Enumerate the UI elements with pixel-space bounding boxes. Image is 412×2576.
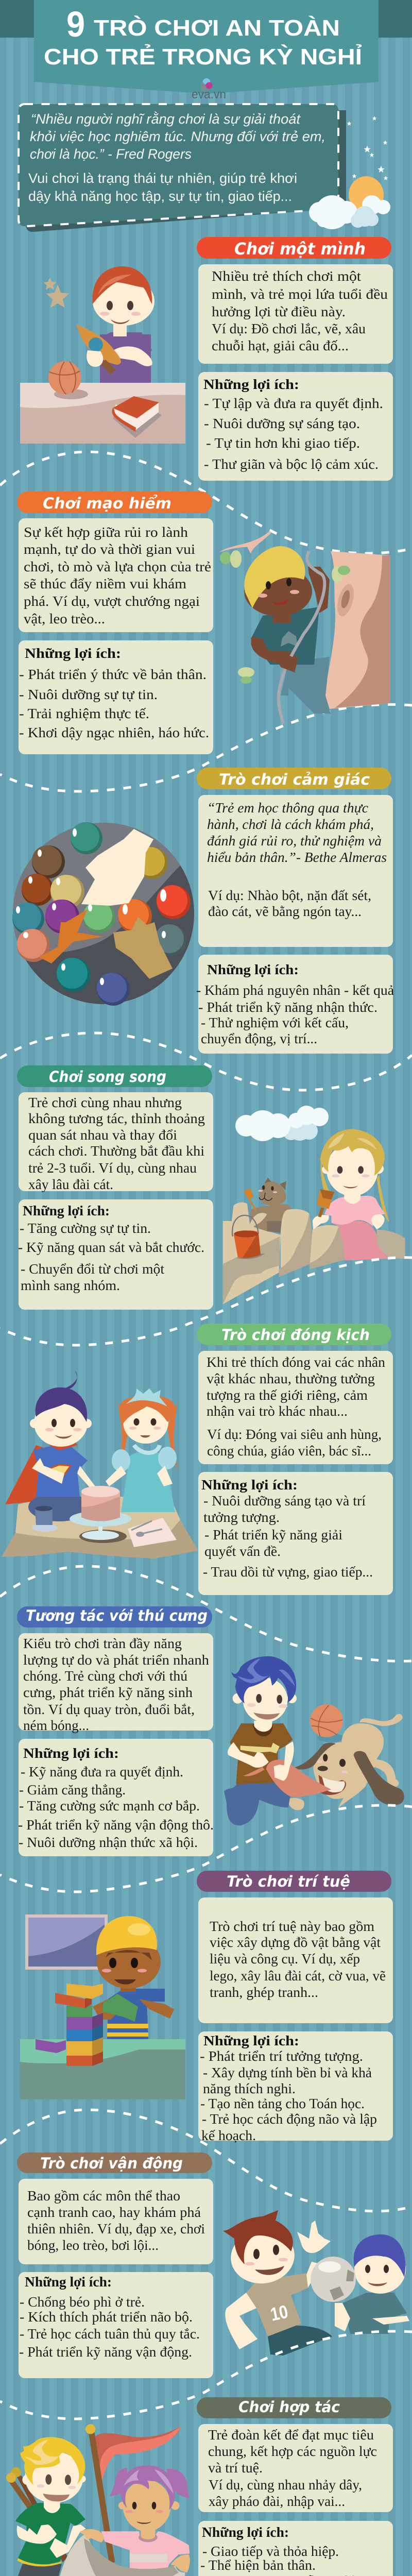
panel: chơi hợp tác benefits — [198, 2521, 393, 2576]
logo: eva.vn — [192, 78, 226, 101]
girl — [313, 1129, 389, 1261]
panel: chơi song song benefits: - Tăng cường sự tự tin. — [20, 1221, 151, 1236]
panel: chơi hợp tác benefits: Những lợi ích: — [202, 2524, 289, 2540]
panel: trò chơi vận động benefits: - Phát triển kỹ năng vận động. — [19, 2344, 192, 2360]
panel: trò chơi trí tuệ benefits: Những lợi ích: — [203, 2033, 299, 2048]
stars — [44, 278, 69, 308]
dashed path 2 — [0, 704, 412, 791]
panel: chơi mạo hiểm benefits: - Trải nghiệm thực tế. — [19, 706, 149, 721]
section 5 heading pill — [197, 1324, 391, 1345]
panel: chơi mạo hiểm description: Sự kết hợp giữa rủi ro lành — [24, 524, 188, 540]
panel: trò chơi cảm giác description: “Trẻ em học thông qua thực — [207, 800, 368, 816]
illustration: girl and bear at sand castle — [223, 1129, 405, 1304]
title — [44, 4, 362, 70]
panel: trò chơi đóng kịch description: nhận vai trò khác nhau... — [207, 1403, 348, 1419]
table — [20, 383, 185, 444]
illustration: children with sack and flag — [6, 2424, 190, 2576]
dashed path 4 — [0, 1258, 412, 1345]
panel: trò chơi đóng kịch description: Khi trẻ thích đóng vai các nhân — [207, 1354, 386, 1370]
quote text: chơi là học.” - Fred Rogers — [30, 146, 192, 162]
bucket — [232, 1215, 265, 1259]
panel: trò chơi trí tuệ description: liệu và công cụ. Ví dụ, xếp — [210, 1951, 360, 1967]
ball — [48, 361, 81, 394]
panel: trò chơi trí tuệ description — [198, 1897, 393, 2023]
panel: tương tác với thú cưng description — [19, 1633, 213, 1733]
paint blobs — [12, 822, 191, 1006]
panel: tương tác với thú cưng benefits: - Tăng cường sức mạnh cơ bắp. — [19, 1798, 200, 1814]
soccer ball — [311, 2257, 356, 2302]
panel: tương tác với thú cưng description: tồn. Ví dụ quay tròn, đuổi bắt, — [23, 1702, 195, 1717]
panel: chơi một mình benefits: Những lợi ích: — [203, 377, 299, 392]
panel: chơi mạo hiểm description: mạnh, tự do và thời gian vui — [24, 541, 195, 557]
cup and saucer — [32, 1506, 58, 1532]
hands — [79, 2529, 190, 2572]
sand ground — [223, 1202, 405, 1304]
panel: tương tác với thú cưng description: Kiểu trò chơi tràn đầy năng — [23, 1636, 182, 1651]
tan splat — [113, 917, 173, 979]
panel: trò chơi cảm giác benefits: chuyển động, vị trí... — [201, 1031, 317, 1046]
panel: chơi một mình description: hưởng lợi từ điều này. — [212, 304, 346, 319]
panel: chơi mạo hiểm benefits: - Khơi dậy ngạc nhiên, háo hức. — [19, 725, 209, 740]
held green block — [103, 1994, 138, 2022]
illustration: boy climbing tree — [219, 531, 390, 724]
title: TRÒ CHƠI AN TOÀN — [94, 15, 340, 41]
dog — [288, 1714, 404, 1810]
panel: trò chơi trí tuệ benefits: kế hoạch. — [201, 2128, 256, 2143]
dashed path 6 — [0, 1805, 412, 1892]
panel: trò chơi vận động description: thiên nhiên. Ví dụ, đạp xe, chơi — [27, 2221, 205, 2236]
panel: tương tác với thú cưng benefits: - Kỹ năng đưa ra quyết định. — [21, 1764, 183, 1780]
block tower — [36, 1984, 103, 2066]
panel: chơi một mình benefits: - Tự tin hơn khi giao tiếp. — [206, 435, 360, 451]
tree trunk — [324, 551, 390, 709]
panel: trò chơi đóng kịch benefits: quyết vấn đề. — [204, 1544, 281, 1559]
panel: chơi song song description: Trẻ chơi cùng nhau nhưng — [28, 1095, 182, 1110]
illustration: boys playing football — [223, 2210, 409, 2355]
cake — [70, 1486, 131, 1543]
panel: tương tác với thú cưng description: lượng tự do và phát triển nhanh — [23, 1652, 210, 1668]
panel: chơi một mình benefits — [198, 372, 393, 481]
panel: trò chơi vận động description — [19, 2179, 213, 2264]
dashed path 1 — [0, 452, 412, 553]
boy in number 10 shirt: 10 — [268, 2301, 290, 2325]
section 3 heading pill: Trò chơi cảm giác — [219, 771, 370, 788]
panel: tương tác với thú cưng benefits: - Nuôi dưỡng nhận thức xã hội. — [19, 1835, 198, 1850]
panel: trò chơi đóng kịch description: công chúa, giáo viên, bác sĩ... — [207, 1443, 371, 1459]
bear — [244, 1178, 292, 1233]
dashed path 7 — [0, 2110, 412, 2211]
section 1 heading pill: Chơi một mình — [234, 239, 366, 259]
table — [20, 2039, 185, 2099]
boy — [244, 546, 331, 714]
panel: trò chơi đóng kịch benefits — [198, 1472, 393, 1595]
panel: trò chơi đóng kịch benefits: tưởng tượng. — [203, 1510, 280, 1525]
panel: chơi mạo hiểm benefits — [19, 640, 213, 754]
panel: trò chơi cảm giác description — [198, 795, 393, 947]
flag — [85, 2424, 181, 2563]
clouds beside sand castle — [235, 1106, 329, 1141]
panel: tương tác với thú cưng benefits — [18, 1739, 214, 1856]
panel: chơi song song description: không tương tác, thỉnh thoảng — [28, 1111, 205, 1126]
panel: tương tác với thú cưng benefits: Những lợi ích: — [23, 1745, 119, 1761]
panel: chơi một mình benefits: - Tự lập và đưa ra quyết định. — [204, 396, 383, 411]
panel: trò chơi trí tuệ benefits: - Phát triển trí tưởng tượng. — [200, 2048, 363, 2064]
purple-haired girl — [101, 2465, 190, 2569]
hand — [81, 829, 153, 906]
panel: chơi mạo hiểm description — [19, 518, 213, 632]
orange splat — [39, 909, 103, 963]
panel: chơi mạo hiểm description: phá. Ví dụ, vượt chướng ngại — [24, 594, 200, 609]
panel: trò chơi cảm giác description: đánh giá rủi ro, thử nghiệm và — [207, 833, 382, 849]
header banner — [0, 0, 412, 94]
panel: chơi một mình description — [198, 264, 393, 364]
panel: trò chơi đóng kịch description: Ví dụ: Đóng vai siêu anh hùng, — [207, 1427, 382, 1442]
panel: chơi mạo hiểm description: vật, leo trèo... — [24, 611, 105, 626]
panel: chơi mạo hiểm benefits: Những lợi ích: — [25, 646, 121, 661]
quote text: dậy khả năng học tập, sự tự tin, giao tiếp... — [28, 189, 292, 204]
panel: chơi hợp tác description: xây pháo đài, nhập vai... — [209, 2494, 345, 2509]
section 8 heading pill — [17, 2153, 212, 2173]
panel: chơi hợp tác benefits: - Giao tiếp và thỏa hiệp. — [202, 2544, 339, 2559]
panel: chơi một mình description: Ví dụ: Đồ chơi lắc, vẽ, xâu — [212, 321, 366, 336]
book — [112, 396, 162, 438]
quote text — [28, 111, 325, 204]
panel: chơi một mình benefits: - Nuôi dưỡng sự sáng tạo. — [204, 416, 360, 431]
panel: chơi song song benefits — [18, 1199, 213, 1310]
panel: trò chơi cảm giác description: đào cát, vẽ bằng ngón tay... — [208, 904, 362, 919]
panel: chơi mạo hiểm benefits: - Nuôi dưỡng sự tự tin. — [19, 687, 158, 702]
panel: trò chơi trí tuệ description: lego, xây lâu đài cát, cờ vua, vẽ — [210, 1968, 386, 1984]
panel: trò chơi đóng kịch benefits: Những lợi ích: — [201, 1477, 298, 1493]
superhero boy — [5, 1370, 95, 1521]
section 2 heading pill: Chơi mạo hiểm — [43, 495, 171, 512]
section 8 heading pill: Trò chơi vận động — [40, 2155, 183, 2172]
panel: chơi song song description: quan sát nhau và thay đổi — [28, 1127, 177, 1143]
panel: tương tác với thú cưng benefits: - Giảm căng thẳng. — [19, 1782, 126, 1798]
title: 9 — [66, 4, 85, 44]
panel: trò chơi trí tuệ description: Trò chơi trí tuệ này bao gồm — [210, 1919, 374, 1934]
panel: trò chơi trí tuệ benefits: - Tạo nền tảng cho Toán học. — [200, 2096, 365, 2111]
panel: chơi mạo hiểm description: sẽ thúc đẩy niềm vui khám — [24, 576, 186, 591]
panel: trò chơi trí tuệ benefits: năng thích nghi. — [203, 2081, 296, 2096]
princess girl — [106, 1388, 179, 1512]
illustration: superhero and princess with cake — [2, 1370, 198, 1558]
panel: trò chơi đóng kịch description: vật khác nhau, thường tưởng — [207, 1371, 375, 1386]
panel: trò chơi vận động benefits — [19, 2272, 213, 2378]
panel: tương tác với thú cưng description: cưng, phát triển kỹ năng sinh — [23, 1685, 193, 1700]
panel: trò chơi vận động benefits: - Chống béo phì ở trẻ. — [20, 2294, 145, 2310]
section 2 heading pill — [17, 492, 212, 513]
panel: trò chơi trí tuệ description: tranh, ghép tranh... — [210, 1985, 318, 2000]
section 1 heading pill — [197, 237, 391, 259]
panel: tương tác với thú cưng description: ném bóng... — [23, 1718, 89, 1733]
section 7 heading pill: Trò chơi trí tuệ — [227, 1873, 350, 1890]
quote text: khỏi việc học nghiêm túc. Nhưng đối với trẻ em, — [30, 129, 325, 144]
panel: chơi mạo hiểm benefits: - Phát triển ý thức về bản thân. — [19, 667, 207, 682]
section 7 heading pill — [197, 1871, 391, 1892]
panel: trò chơi cảm giác benefits: - Thử nghiệm với kết cấu, — [201, 1015, 349, 1030]
panel: chơi một mình description: chuỗi hạt, giải câu đố... — [212, 338, 349, 353]
panel: trò chơi vận động benefits: - Trẻ học cách tuân thủ quy tắc. — [20, 2326, 200, 2342]
logo: eva.vn: eva.vn — [192, 88, 226, 101]
illustration: paint palette — [0, 819, 194, 1006]
section 4 heading pill: Chơi song song — [49, 1068, 166, 1086]
section 6 heading pill: Tương tác với thú cưng — [26, 1607, 208, 1624]
section 9 heading pill — [197, 2397, 391, 2418]
panel: chơi song song benefits: - Chuyển đổi từ chơi một — [21, 1261, 165, 1277]
blond boy — [15, 2437, 86, 2576]
panel: trò chơi cảm giác benefits: Những lợi ích: — [207, 962, 299, 977]
panel: chơi một mình description: mình, và trẻ mọi lứa tuổi đều — [212, 286, 388, 302]
panel: trò chơi vận động description: bóng, leo trèo, bơi lội... — [27, 2238, 159, 2253]
panel: trò chơi đóng kịch description — [198, 1351, 393, 1464]
dashed path 3 — [0, 1033, 412, 1090]
panel: chơi hợp tác description: chung, kết hợp các nguồn lực — [208, 2444, 377, 2459]
panel: trò chơi vận động description: cạnh tranh cao, hay khám phá — [27, 2205, 201, 2220]
panel: chơi song song benefits: - Kỹ năng quan sát và bắt chước. — [18, 1240, 204, 1255]
panel: chơi hợp tác description — [198, 2424, 393, 2512]
panel: chơi song song benefits: mình sang nhóm. — [21, 1278, 120, 1293]
panel: trò chơi đóng kịch benefits: - Nuôi dưỡng sáng tạo và trí — [203, 1493, 366, 1509]
window — [25, 1914, 108, 1970]
rocket — [76, 325, 121, 374]
branch and leaves — [219, 531, 350, 684]
sand castle foreground — [223, 1209, 345, 1304]
panel: trò chơi trí tuệ benefits: - Trẻ học cách động não và lập — [202, 2111, 377, 2127]
panel: trò chơi vận động benefits: - Kích thích phát triển não bộ. — [20, 2309, 193, 2325]
panel: trò chơi trí tuệ benefits: - Xây dựng tính bền bỉ và khả — [203, 2065, 372, 2080]
rope — [279, 551, 324, 724]
section 9 heading pill: Chơi hợp tác — [238, 2398, 340, 2416]
icon: stars, sun and clouds — [309, 116, 390, 229]
panel: chơi hợp tác description: Trẻ đoàn kết để đạt mục tiêu — [208, 2427, 374, 2443]
panel: trò chơi vận động description: Bao gồm các môn thể thao — [27, 2188, 180, 2204]
panel: chơi hợp tác description: Ví dụ, cùng nhau nhảy dây, — [209, 2477, 362, 2493]
panel: trò chơi đóng kịch benefits: - Phát triển kỹ năng giải — [204, 1527, 342, 1543]
panel: trò chơi cảm giác description: hành, chơi là cách khám phá, — [207, 817, 374, 832]
illustration: boy building with blocks — [20, 1914, 185, 2099]
quote text: Vui chơi là trạng thái tự nhiên, giúp trẻ khơi — [28, 171, 297, 186]
panel: chơi song song benefits: Những lợi ích: — [23, 1203, 110, 1218]
dashed path 8 — [0, 2331, 412, 2419]
blanket — [2, 1497, 198, 1558]
section 5 heading pill: Trò chơi đóng kịch — [221, 1326, 370, 1344]
section 3 heading pill — [197, 768, 391, 789]
boy — [93, 1916, 174, 2039]
panel: trò chơi trí tuệ benefits — [198, 2031, 393, 2143]
napkin and cutlery — [128, 1518, 177, 1547]
panel: trò chơi đóng kịch description: tượng ra thế giới riêng, cảm — [207, 1387, 368, 1403]
illustration: boy with rocket at table — [20, 266, 185, 444]
panel: trò chơi vận động benefits: Những lợi ích: — [25, 2274, 112, 2290]
panel: chơi song song description: xây lâu đài cát. — [28, 1177, 113, 1192]
title: CHO TRẺ TRONG KỲ NGHỈ — [44, 44, 362, 70]
panel: chơi song song description: trẻ 2-3 tuổi. Ví dụ, cùng nhau — [28, 1160, 197, 1176]
panel: chơi song song description — [19, 1092, 213, 1192]
panel: trò chơi cảm giác benefits: - Phát triển kỹ năng nhận thức. — [198, 999, 377, 1015]
panel: trò chơi cảm giác description: Ví dụ: Nhào bột, nặn đất sét, — [208, 888, 371, 903]
panel: chơi hợp tác description: và trí tuệ. — [208, 2460, 263, 2476]
panel: trò chơi cảm giác description: hiểu bản thân.”- Bethe Almeras — [207, 850, 387, 865]
panel: chơi mạo hiểm description: chơi, tò mò và lựa chọn của trẻ — [24, 559, 211, 574]
blue-haired boy — [335, 2234, 409, 2334]
panel: trò chơi cảm giác benefits — [196, 955, 394, 1054]
boy in number 10 shirt — [223, 2210, 332, 2355]
quote text: “Nhiều người nghĩ rằng chơi là sự giải thoát — [31, 111, 301, 127]
panel: chơi một mình description: Nhiều trẻ thích chơi một — [212, 268, 362, 284]
panel: tương tác với thú cưng description: chóng. Trẻ cùng chơi với thú — [23, 1668, 188, 1684]
illustration: boy playing with dog — [224, 1656, 404, 1825]
section 4 heading pill — [17, 1065, 212, 1087]
ball — [310, 1704, 345, 1742]
panel: chơi một mình benefits: - Thư giãn và bộc lộ cảm xúc. — [204, 456, 379, 472]
boy — [93, 266, 154, 384]
panel: intro quote — [19, 104, 346, 232]
panel: tương tác với thú cưng benefits: - Phát triển kỹ năng vận động thô. — [18, 1817, 214, 1833]
panel: chơi hợp tác benefits: - Thể hiện bản thân. — [200, 2557, 316, 2573]
dashed path 5 — [0, 1566, 412, 1661]
boy — [224, 1656, 331, 1825]
sack — [60, 2535, 185, 2576]
panel: trò chơi đóng kịch benefits: - Trau dồi từ vựng, giao tiếp... — [203, 1564, 373, 1580]
panel: trò chơi cảm giác benefits: - Khám phá nguyên nhân - kết quả — [196, 982, 394, 998]
panel: trò chơi trí tuệ description: việc xây dựng đồ vật bằng vật — [210, 1935, 381, 1950]
sticks — [6, 2467, 68, 2562]
panel: chơi song song description: cách chơi. Thường bắt đầu khi — [28, 1143, 204, 1159]
